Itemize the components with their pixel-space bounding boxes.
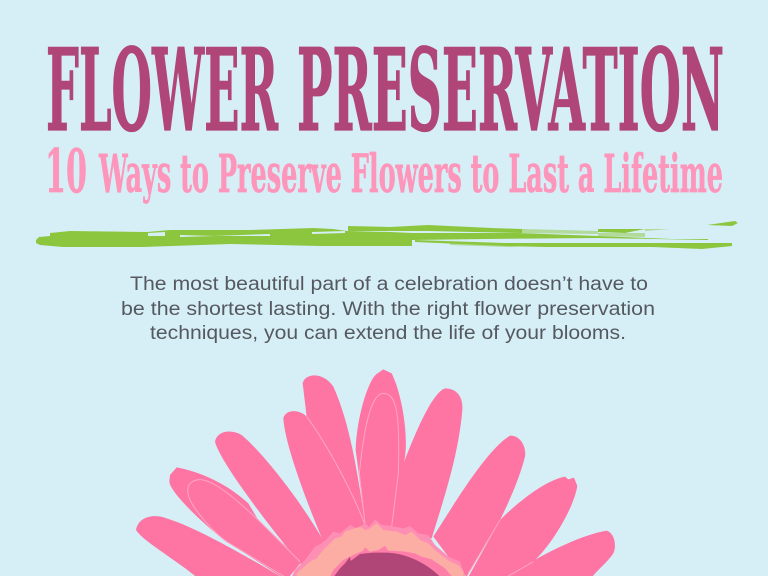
flower center <box>333 553 441 576</box>
title: FLOWER <box>46 24 278 157</box>
flower illustration <box>136 369 615 576</box>
green brush stroke divider <box>36 221 738 249</box>
flower ring <box>290 519 467 576</box>
petals <box>136 369 615 576</box>
intro paragraph: be the shortest lasting. With the right flower preservation <box>121 299 655 320</box>
dry-brush speckle <box>450 229 670 247</box>
intro paragraph <box>121 274 655 344</box>
intro paragraph: The most beautiful part of a celebration doesn’t have to <box>130 274 648 295</box>
petal outlines <box>188 393 533 576</box>
intro paragraph: techniques, you can extend the life of your blooms. <box>150 323 626 344</box>
subtitle: 10 <box>45 137 87 207</box>
